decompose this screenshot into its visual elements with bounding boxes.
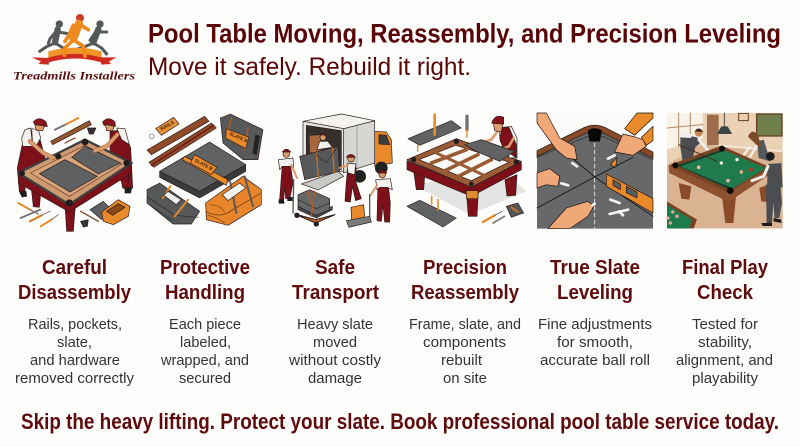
step 6: final play check — [676, 257, 773, 387]
step 2: protective handling: Each piece — [169, 316, 241, 333]
step 5: true slate leveling: for smooth, — [557, 334, 633, 351]
pocket — [588, 128, 602, 141]
table legs — [679, 183, 768, 223]
step 2: protective handling: Handling — [165, 282, 245, 304]
step 1: careful disassembly: removed correctly — [15, 370, 134, 387]
foreground table corner — [667, 201, 697, 228]
truck top — [303, 114, 375, 129]
wrapped slate B — [220, 114, 263, 160]
step 5: true slate leveling: True Slate — [550, 257, 640, 279]
center worker — [345, 166, 361, 202]
window — [667, 113, 703, 150]
seams — [537, 153, 653, 216]
truck cab — [375, 131, 392, 166]
step 6: final play check: Check — [697, 282, 754, 304]
far players — [680, 134, 701, 161]
table legs — [31, 188, 41, 207]
step 2: protective handling — [160, 257, 250, 387]
cue — [679, 145, 717, 161]
step 3: safe transport: moved — [313, 334, 357, 351]
pockets — [672, 146, 734, 194]
chimney panel — [707, 115, 719, 145]
step 4: precision reassembly: on site — [443, 370, 487, 387]
left worker — [280, 164, 293, 200]
wainscot — [702, 144, 783, 151]
illustration: true slate leveling — [537, 113, 653, 229]
lamp — [723, 113, 726, 126]
top-left hand — [537, 113, 577, 160]
subtitle: Move it safely. Rebuild it right. — [148, 53, 471, 81]
spirit level — [606, 174, 653, 213]
step 4: precision reassembly: rebuilt — [441, 352, 483, 369]
illustration: protective handling: RAILS — [160, 119, 176, 132]
cargo opening — [303, 121, 344, 171]
step 1: careful disassembly — [15, 257, 134, 387]
tools — [483, 215, 495, 222]
step 4: precision reassembly: Frame, slate, and — [409, 316, 521, 333]
step 4: precision reassembly: components — [423, 334, 506, 351]
illustration: safe transport — [278, 114, 392, 227]
hand tools — [18, 203, 30, 210]
wheels — [375, 162, 387, 174]
legs — [450, 153, 460, 165]
worker arms — [30, 141, 53, 158]
top slate — [408, 121, 461, 145]
pictures — [757, 114, 782, 136]
step 6: final play check: stability, — [698, 334, 752, 351]
chalk marks — [561, 155, 628, 215]
table apron — [18, 164, 132, 212]
step 5: true slate leveling — [538, 257, 652, 369]
step 1: careful disassembly: and hardware — [30, 352, 120, 369]
felt — [677, 149, 766, 190]
illustration: protective handling: SLATE B — [194, 158, 214, 172]
slate panels — [39, 160, 97, 192]
illustration: protective handling: SLATE B — [229, 131, 249, 144]
orange blanket rolls — [206, 176, 261, 225]
corner blocks — [411, 139, 519, 186]
illustration: careful disassembly — [17, 118, 133, 231]
right worker body — [110, 130, 133, 190]
step 2: protective handling: labeled, — [180, 334, 231, 351]
step 6: final play check: playability — [692, 370, 758, 387]
step 6: final play check: alignment, and — [676, 352, 773, 369]
step 5: true slate leveling: Leveling — [557, 282, 633, 304]
step 1: careful disassembly: Disassembly — [18, 282, 132, 304]
wrapped slate — [300, 146, 340, 180]
step 2: protective handling: Protective — [160, 257, 250, 279]
step 3: safe transport: Transport — [292, 282, 379, 304]
step 6: final play check: Final Play — [682, 257, 769, 279]
logo: Treadmills Installers: Treadmills Installers — [13, 70, 136, 82]
rail pieces and hammer — [51, 121, 91, 145]
left worker body — [17, 131, 45, 193]
step 3: safe transport: damage — [308, 370, 362, 387]
worker in truck — [320, 134, 326, 140]
floor shadow — [413, 171, 526, 215]
pockets — [19, 139, 130, 206]
floor — [667, 144, 783, 228]
wooden rails — [147, 116, 209, 155]
step 3: safe transport: Heavy slate — [297, 316, 373, 333]
room wall — [667, 113, 783, 228]
frame — [407, 139, 521, 187]
left hand — [537, 169, 560, 188]
step 3: safe transport: Safe — [315, 257, 355, 279]
pallet jack with toolbox — [351, 205, 365, 221]
table frame — [18, 140, 132, 205]
step 2: protective handling: secured — [179, 370, 231, 387]
standing player — [766, 185, 782, 223]
illustration: protective handling — [147, 114, 263, 225]
slate and toolbox — [90, 201, 115, 220]
worker — [499, 126, 517, 158]
truck box side — [344, 121, 375, 173]
ramp — [301, 171, 344, 190]
rails tag — [156, 117, 179, 135]
step 2: protective handling: wrapped, and — [160, 352, 249, 369]
illustration: final play check — [666, 113, 783, 228]
apron — [407, 161, 521, 196]
dolly with slate boxes — [291, 180, 296, 213]
balls — [720, 161, 723, 165]
table rail — [669, 146, 770, 195]
step 1: careful disassembly: slate, — [57, 334, 92, 351]
slate surface — [537, 129, 653, 229]
top-right hands — [615, 134, 646, 155]
illustration: precision reassembly — [407, 115, 526, 227]
step 1: careful disassembly: Rails, pockets, — [28, 316, 122, 333]
step 4: precision reassembly: Precision — [423, 257, 507, 279]
step 4: precision reassembly: Reassembly — [411, 282, 520, 304]
bottom hand — [548, 201, 594, 229]
step 5: true slate leveling: accurate ball roll — [540, 352, 650, 369]
step 6: final play check: Tested for — [692, 316, 758, 333]
lower slate — [407, 200, 456, 227]
right worker — [377, 183, 390, 222]
wood rail — [537, 125, 653, 158]
logo: Treadmills Installers — [13, 14, 136, 83]
main slate stack — [160, 165, 246, 198]
step 3: safe transport — [288, 257, 382, 387]
step 4: precision reassembly — [409, 257, 521, 387]
slate being placed — [465, 140, 515, 161]
step 1: careful disassembly: Careful — [42, 257, 107, 279]
gray wrapped bundle — [147, 183, 200, 224]
step 3: safe transport: without costly — [288, 352, 382, 369]
step 5: true slate leveling: Fine adjustments — [538, 316, 652, 333]
